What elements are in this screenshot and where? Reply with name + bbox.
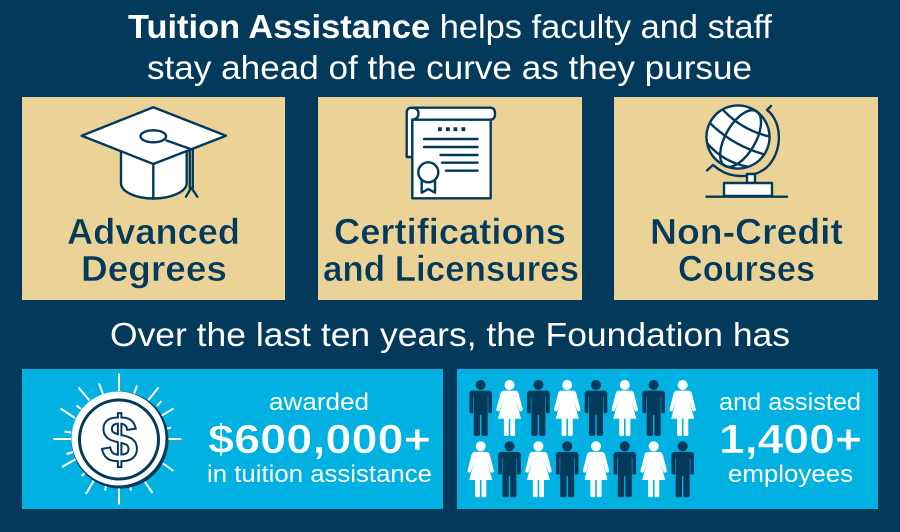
- heading: advanced degrees: Advanced: [67, 211, 240, 252]
- icon: row of people bottom: [467, 441, 694, 497]
- heading: non-credit courses: [650, 211, 843, 289]
- heading: certifications and licensures: [323, 211, 579, 289]
- icon: row of people top: [469, 380, 696, 436]
- icon: dollar coin: [54, 374, 182, 504]
- title: stay ahead of the curve as they pursue: [147, 49, 752, 86]
- icon: globe: [695, 94, 787, 197]
- stat: employees: employees: [728, 461, 853, 488]
- icon: graduation cap: [82, 107, 226, 198]
- icon: dollar coin: $: [101, 402, 138, 476]
- panel: employees assisted: [457, 369, 878, 509]
- stat: employees: [719, 389, 862, 488]
- title: Tuition Assistance helps faculty and staff: [128, 8, 773, 45]
- heading: non-credit courses: Non-Credit: [650, 211, 843, 252]
- stat: tuition assistance: awarded: [269, 389, 369, 416]
- panel: certifications and licensures: [318, 97, 582, 300]
- heading: advanced degrees: Degrees: [81, 248, 227, 289]
- icon: diploma: [407, 108, 495, 198]
- stat: employees: 1,400+: [719, 416, 862, 462]
- heading: certifications and licensures: Certifications: [334, 211, 566, 252]
- heading: advanced degrees: [67, 211, 240, 289]
- heading: non-credit courses: Courses: [678, 248, 815, 289]
- stat: tuition assistance: $600,000+: [208, 416, 431, 462]
- panel: non-credit courses: [614, 94, 878, 300]
- panel: tuition awarded: [22, 369, 443, 509]
- stat: tuition assistance: [207, 389, 432, 488]
- stat: tuition assistance: in tuition assistance: [207, 461, 432, 488]
- panel: advanced degrees: [22, 97, 285, 300]
- title: [128, 8, 773, 86]
- subheading: Over the last ten years, the Foundation has: [110, 316, 790, 353]
- heading: certifications and licensures: and Licensures: [323, 248, 579, 289]
- stat: employees: and assisted: [719, 389, 861, 416]
